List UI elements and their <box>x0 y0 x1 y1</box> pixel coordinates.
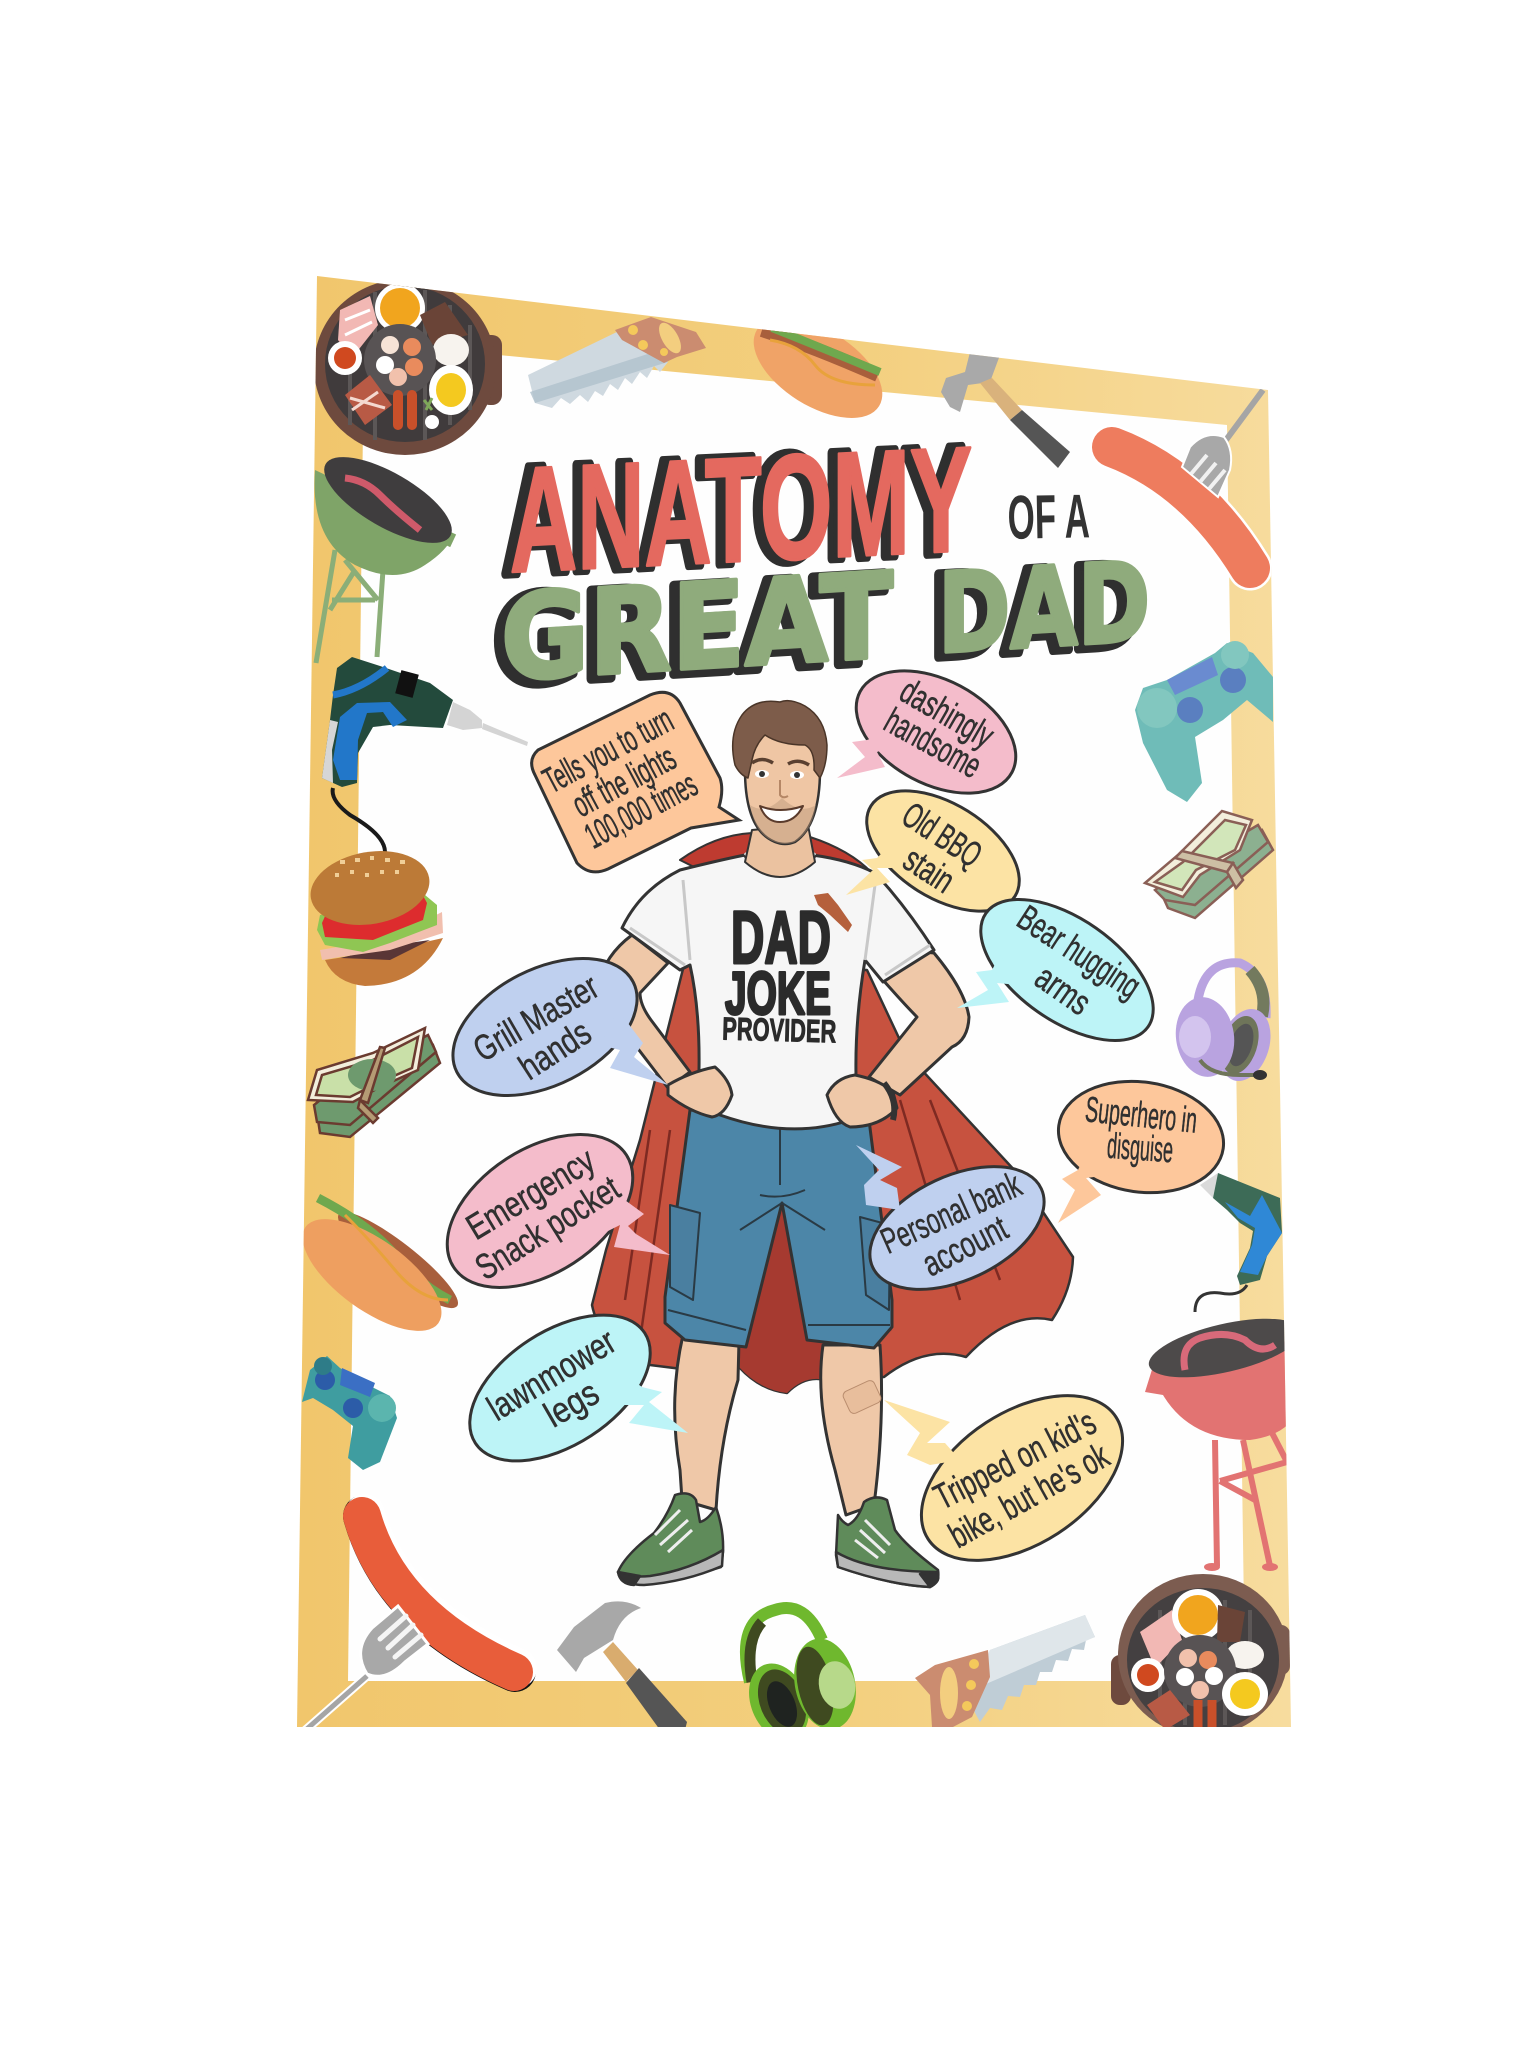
callout: bear hugging arms: arms <box>1028 956 1099 1023</box>
callout: dashingly handsome <box>836 646 1036 818</box>
callout: dashingly handsome: handsome <box>878 700 989 786</box>
shirt text: PROVIDER: PROVIDER <box>722 1011 837 1049</box>
callout: tells you to turn off the lights <box>532 692 739 872</box>
callout: lawnmower legs: lawnmower <box>480 1320 623 1429</box>
illustration: superhero dad <box>592 701 1073 1587</box>
callout: old BBQ stain: stain <box>896 838 962 901</box>
icon: hammer bottom <box>557 1601 687 1730</box>
icon: drill left <box>322 657 528 852</box>
callout: grill master hands: Grill Master <box>466 966 605 1070</box>
callout: bear hugging arms: Bear hugging <box>1010 897 1148 1006</box>
icon: green headphones <box>740 1602 856 1727</box>
title: ANATOMY: ANATOMY <box>510 415 972 604</box>
shirt stain <box>814 893 852 932</box>
icon: red kettle grill <box>1145 1318 1286 1571</box>
callout: superhero in disguise: disguise <box>1106 1125 1175 1170</box>
icon: game controller right <box>1135 641 1273 802</box>
shoes <box>618 1493 938 1587</box>
arms <box>598 935 969 1095</box>
callout: tells you to turn off the lights: Tells you to turn <box>536 699 680 801</box>
callout: emergency snack pocket: Snack pocket <box>468 1167 627 1288</box>
callout: superhero in disguise <box>1051 1071 1231 1223</box>
title: ANATOMY <box>502 414 972 607</box>
callout: emergency snack pocket: Emergency <box>459 1139 602 1248</box>
poster frame <box>297 276 1291 1727</box>
title: OF A: OF A <box>1007 482 1090 553</box>
band-aid <box>842 1379 882 1415</box>
callout: bear hugging arms <box>957 871 1177 1069</box>
callout: personal bank account: account <box>915 1207 1014 1284</box>
callout: dashingly handsome: dashingly <box>893 670 1001 756</box>
icon: drill right <box>1195 1173 1282 1312</box>
callout: tells you to turn off the lights: 100,000 times <box>578 763 704 856</box>
icon: burger <box>310 851 443 986</box>
icon: purple headphones <box>1176 958 1271 1081</box>
callout: personal bank account: Personal bank <box>874 1163 1028 1262</box>
icon: hot dog top <box>754 328 882 418</box>
callout: tells you to turn off the lights: off the lights <box>565 737 682 825</box>
icon: green kettle grill <box>314 457 456 664</box>
shirt text: DAD: DAD <box>731 896 831 979</box>
icon: grill bottom right <box>1111 1574 1290 1736</box>
callout: grill master hands <box>430 930 668 1124</box>
callout: emergency snack pocket <box>420 1103 670 1319</box>
icon: hammer top <box>941 352 1070 468</box>
icon: money stack right <box>1145 811 1273 918</box>
title: GREAT: GREAT <box>493 549 885 714</box>
callout: lawnmower legs <box>444 1285 688 1491</box>
callout: old BBQ stain <box>846 766 1040 936</box>
title: GREAT: GREAT <box>501 546 893 708</box>
callout: tripped on kid's bike: bike, but he's ok <box>942 1434 1116 1556</box>
icon: fork and sausage bottom left <box>300 1514 517 1735</box>
title: DAD: DAD <box>938 538 1150 678</box>
callout: personal bank account <box>851 1142 1063 1314</box>
title: DAD: DAD <box>930 540 1142 684</box>
head <box>733 701 827 844</box>
icon: game controller left <box>302 1356 397 1470</box>
callout: grill master hands: hands <box>511 1011 598 1088</box>
poster infographic <box>297 276 1291 1727</box>
title: ANATOMY: ANATOMY <box>502 414 964 607</box>
cape <box>592 833 1073 1393</box>
icon: money stack left <box>308 1028 440 1137</box>
callout: tripped on kid's bike: Tripped on kid's <box>927 1401 1102 1518</box>
callout: superhero in disguise: Superhero in <box>1083 1088 1199 1141</box>
callout: old BBQ stain: Old BBQ <box>895 794 990 875</box>
neck <box>745 825 815 877</box>
shorts <box>665 1110 892 1348</box>
icon: hand saw top <box>528 317 706 408</box>
t-shirt <box>622 853 934 1129</box>
legs <box>675 1335 882 1515</box>
shirt text: JOKE: JOKE <box>725 960 831 1027</box>
callout: lawnmower legs: legs <box>537 1372 606 1435</box>
hands <box>668 1067 897 1127</box>
icon: hot dog left <box>304 1194 458 1331</box>
callout: tripped on kid's bike <box>884 1362 1152 1594</box>
icon: fork and sausage top right <box>1112 390 1263 568</box>
icon: grill top left <box>314 279 502 455</box>
icon: hand saw bottom <box>915 1615 1095 1727</box>
